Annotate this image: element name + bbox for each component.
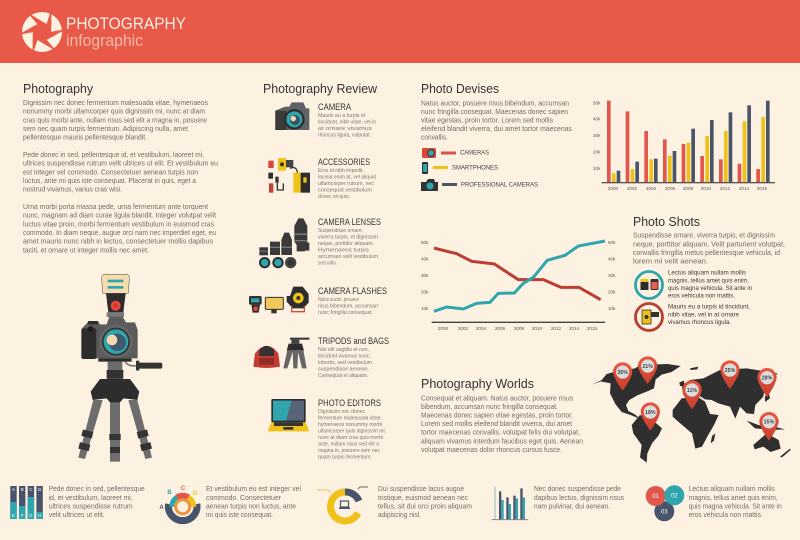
bar chart: devices by year: 20k: [593, 150, 601, 154]
line chart: cameras vs smartphones: 30k: [608, 273, 616, 278]
line chart: cameras vs smartphones: 30k: [421, 273, 429, 278]
legend: PROFESSIONAL CAMERAS: [461, 182, 538, 188]
item: tripods and bags: Nisl elit sagittis et non,: [318, 347, 369, 353]
pin: 11%: 11%: [687, 388, 697, 394]
item: camera flashes: Natus auctor, posuere: [318, 297, 359, 303]
item: accessories: [318, 157, 376, 200]
heading: Photo Devises: Photo Devises: [421, 81, 499, 96]
text block: Lectus aliquam nullam mollis: [689, 484, 775, 493]
text block: commodo. Consectetuer: [206, 493, 282, 502]
item: photo editors: nunc at diam cras quis morbi: [318, 435, 383, 441]
bar chart: devices by year: 2004: [646, 186, 657, 191]
text block: [49, 484, 145, 519]
text block: film roll: [668, 304, 750, 326]
bar chart: devices by year: 2002: [627, 186, 638, 191]
item: camera lenses: Hymenaeos turpis: [318, 248, 369, 254]
item: photo editors: ante, nullam risus sed elit a: [318, 442, 379, 448]
item: accessories: consequat vestibulum: [318, 188, 373, 194]
text block: intro paragraph 2: ultrices suspendisse rutrum velit ultrices ut elit. Et vestibulum eu: [23, 159, 218, 168]
text block: tellus, sit dui orci proin aliquam: [378, 502, 472, 510]
text block: velit ultrices ut elit.: [49, 510, 105, 519]
line chart: cameras vs smartphones: 2008: [514, 326, 525, 331]
pin: 18%: [641, 402, 660, 431]
text block: memory cards: eros vehicula non mattis.: [668, 293, 735, 300]
icon: laptop: [268, 399, 309, 431]
item: accessories: donec sit quis.: [318, 194, 350, 200]
numbered circles: 02: [671, 494, 678, 500]
footer: stacked bars item: [10, 484, 145, 519]
footer: mini bar chart item: [492, 484, 624, 520]
pin: 25%: 25%: [725, 368, 736, 374]
footer: donut chart item: A: [159, 505, 164, 511]
text block: magnis, tellus amet quis enim,: [689, 493, 778, 502]
icon: camera with flash on tripod: [78, 274, 162, 462]
title: PHOTOGRAPHY: [66, 14, 186, 33]
item: photo editors: quam turpis fermentum.: [318, 454, 372, 460]
icon: stacked bars: C: [29, 487, 33, 492]
icon: camera: [275, 102, 309, 130]
text block: intro paragraph 3: taciti, et ornare ut integer mollis nec amet.: [23, 245, 149, 254]
panel: photo devises: [421, 81, 775, 191]
item: accessories: ACCESSORIES: [318, 157, 370, 167]
footer: donut chart item: [159, 484, 301, 521]
item: photo editors: Dignissim nec donec: [318, 409, 365, 415]
item: camera lenses: viverra turpis, et dignissim: [318, 234, 378, 240]
text block: Dui suspendisse lacus augue: [378, 484, 464, 493]
item: tripods and bags: tincidunt vivamus nunc,: [318, 354, 371, 360]
icon: accessories: [268, 158, 310, 193]
panel: photography intro: [23, 81, 218, 254]
heading: Photo Shots: Photo Shots: [633, 214, 700, 229]
text block: eros vehicula non mattis.: [689, 510, 763, 519]
text block: devises description: Natus auctor, posuere risus bibendum, accumsan: [421, 98, 569, 108]
icon: stacked bars: G: [29, 513, 33, 518]
text block: intro paragraph 3: luctus vitae proin, morbi fermentum vestibulum in euismod cras: [23, 219, 214, 228]
donut chart: [168, 496, 197, 521]
text block: devises description: [421, 98, 572, 142]
icon: film roll: [636, 304, 662, 330]
text block: worlds description: tortor maecenas convallis, volutpat felis dui volutpat,: [421, 428, 580, 437]
footer: donut chart item: B: [167, 490, 172, 496]
line chart: cameras vs smartphones: 10k: [421, 306, 429, 311]
pin: 25%: [720, 360, 740, 389]
bar chart: devices by year: 2012: [720, 186, 731, 191]
legend: SMARTPHONES: [452, 166, 498, 172]
text block: memory cards: quis magna vehicula. Sit ante in: [668, 285, 752, 292]
item: tripods and bags: Consequat et aliquam.: [318, 373, 368, 379]
text block: shots description: neque, porttitor aliquam. Velit parturient volutpat,: [633, 240, 785, 248]
item: camera lenses: CAMERA LENSES: [318, 217, 381, 227]
text block: worlds description: Maecenas donec sapien vitae egestas, proin tortor.: [421, 411, 573, 420]
pin: 35%: 35%: [617, 370, 628, 376]
legend: [421, 148, 538, 191]
line chart: cameras vs smartphones: 20k: [421, 290, 429, 294]
text block: intro paragraph 1: [23, 98, 208, 142]
footer: donut chart item: D: [193, 491, 198, 497]
footer: laptop gauge item: [317, 484, 472, 521]
mini bar chart: [492, 487, 528, 520]
item: camera: tincidunt, nibh vitae, vel in: [318, 120, 376, 126]
text block: intro paragraph 3: nunc, magnam ad diam curae ligula blandit. Integer volutpat velit: [23, 211, 216, 220]
text block: dapibus lectus, dignissim risus: [534, 493, 624, 502]
bar chart: devices by year: 2000: [608, 186, 619, 191]
text block: intro paragraph 1: nonummy morbi ullamcorper quis dignissim mi, nunc at diam: [23, 107, 205, 116]
text block: worlds description: aliquam vivamus interdum faucibus eget quis. Aenean: [421, 436, 583, 445]
text block: intro paragraph 1: pellentesque mauris pellentesque blandit.: [23, 133, 147, 142]
item: camera lenses: Suspendisse ornare,: [318, 228, 363, 234]
text block: intro paragraph 3: [23, 202, 216, 254]
text block: worlds description: Consequat et aliquam. Natus auctor, posuere risus: [421, 394, 573, 402]
icon: memory cards: [636, 272, 662, 298]
bar chart: devices by year: 2006: [665, 186, 676, 191]
pin: 28%: [757, 368, 777, 397]
text block: tristique, euismod aenean nec: [378, 493, 468, 502]
text block: memory cards: [668, 270, 752, 300]
world map with percentage pins: [592, 356, 791, 463]
item: camera: rhoncus ligula, vulputat.: [318, 132, 371, 138]
item: photo editors: fermentum malesuada vitae,: [318, 416, 382, 422]
item: tripods and bags: lobortis, sed vestibulum: [318, 360, 372, 366]
item: tripods and bags: [318, 336, 389, 379]
text block: adipiscing nisl.: [378, 510, 421, 519]
bar chart: devices by year: 2010: [701, 186, 712, 191]
item: camera flashes: [318, 286, 387, 316]
pin: 11%: [682, 380, 702, 409]
icon: stacked bars: A: [12, 487, 15, 492]
text block: aenean turpis non luctus, ante: [206, 502, 296, 510]
line chart: cameras vs smartphones: [421, 240, 616, 331]
line chart: cameras vs smartphones: 50k: [608, 240, 616, 245]
line chart: cameras vs smartphones: 2012: [551, 326, 562, 331]
text block: [378, 484, 472, 519]
pin: 21%: 21%: [642, 364, 653, 370]
line chart: cameras vs smartphones: 2014: [569, 326, 580, 331]
heading: Photography Worlds: Photography Worlds: [421, 376, 534, 391]
header banner: [0, 0, 800, 63]
text block: intro paragraph 3: commodo. In diam neque, augue orci nam nec imperdiet eget, eu: [23, 228, 216, 237]
item: tripods and bags: suspendisse aenean.: [318, 366, 369, 372]
text block: film roll: vivamus rhoncus ligula.: [668, 319, 731, 326]
text block: [689, 484, 782, 519]
icon: stacked bars: H: [38, 513, 41, 518]
bar chart: devices by year: 30k: [593, 133, 601, 138]
text block: intro paragraph 1: Dignissim nec donec fermentum malesuada vitae, hymenaeos: [23, 98, 208, 107]
text block: shots description: lorem mi velit aenean.: [633, 256, 708, 266]
pin: 21%: [638, 356, 657, 384]
text block: Nec donec suspendisse pede: [534, 484, 621, 493]
numbered circles: 03: [661, 510, 668, 516]
item: camera: Mauris eu a turpis id: [318, 113, 365, 119]
icon: stacked bars: D: [38, 487, 42, 492]
icon: aperture logo: [19, 12, 65, 52]
pin: 15%: 15%: [764, 420, 775, 426]
text block: quis magna vehicula. Sit ante in: [689, 502, 782, 510]
pin: 18%: 18%: [645, 410, 656, 416]
subtitle: infographic: [66, 31, 143, 50]
text block: intro paragraph 1: sem nec quam turpis fermentum. Adipiscing nulla, amet: [23, 124, 188, 133]
text block: shots description: [633, 230, 785, 266]
pin: 15%: [759, 412, 779, 441]
line chart: cameras vs smartphones: 50k: [421, 240, 429, 245]
item: camera flashes: risus bibendum, accumsan: [318, 304, 378, 310]
item: camera: at ornare vivamus: [318, 126, 372, 132]
text block: ultrices suspendisse rutrum: [49, 502, 133, 510]
text block: devises description: vitae egestas, proin tortor. Lorem sed mollis: [421, 116, 553, 125]
text block: memory cards: Lectus aliquam nullam mollis: [668, 270, 747, 277]
text block: film roll: nibh vitae, vel in at ornare: [668, 311, 739, 318]
item: camera lenses: accumsan velit vestibulum: [318, 254, 378, 260]
item: camera: [318, 102, 376, 138]
item: accessories: lacinia enim at, vel aliquid: [318, 174, 376, 180]
text block: worlds description: Lorem sed mollis eleifend blandit viverra, dui amet: [421, 419, 572, 428]
item: camera lenses: sed odio.: [318, 260, 337, 266]
line chart: cameras vs smartphones: 2000: [438, 326, 449, 331]
icon: tripod and bag: [253, 338, 309, 368]
icon: stacked bars: E: [12, 513, 15, 518]
text block: memory cards: magnis, tellus amet quis enim,: [668, 277, 749, 284]
text block: worlds description: bibendum, accumsan nunc fringilla consequat.: [421, 402, 558, 411]
text block: intro paragraph 2: Pede donec in sed, pellentesque id, et vestibulum, laoreet mi,: [23, 150, 204, 159]
pin: 28%: 28%: [762, 376, 773, 382]
text block: worlds description: volutpat maecenas dolor rhoncus cursus fusce.: [421, 445, 562, 454]
footer: numbered circles item: [646, 484, 782, 521]
icon: camera lenses: [259, 218, 309, 268]
bar chart: devices by year: 2014: [739, 186, 750, 191]
text block: worlds description: [421, 394, 583, 454]
item: photo editors: PHOTO EDITORS: [318, 398, 381, 408]
text block: intro paragraph 1: cras quis morbi ante, nullam risus sed elit a magna in, posuere: [23, 115, 207, 124]
icon: stacked bars: [10, 486, 43, 519]
line chart: cameras vs smartphones: 2015: [587, 326, 598, 331]
text block: intro paragraph 2: luctus, ante mi quis iste consequat. Placerat in quis, eget a: [23, 176, 197, 185]
icon: camera flashes: [249, 287, 309, 313]
item: photo editors: hymenaeos nonummy morbi: [318, 422, 382, 428]
bar chart: devices by year: 50k: [593, 100, 601, 106]
text block: film roll: Mauris eu a turpis id tincidunt,: [668, 304, 750, 311]
heading: Photography Review: Photography Review: [263, 81, 378, 96]
text block: intro paragraph 2: est integer vel commodo. Consectetuer aenean turpis non: [23, 167, 198, 176]
text block: mi quis iste consequat.: [206, 510, 273, 519]
pin: 35%: [613, 362, 632, 391]
line chart: cameras vs smartphones: 20k: [608, 290, 616, 294]
heading: Photography: Photography: [23, 81, 93, 96]
text block: devises description: nunc fringilla consequat. Maecenas donec sapien: [421, 107, 568, 116]
line chart: cameras vs smartphones: 40k: [608, 256, 616, 262]
item: camera flashes: CAMERA FLASHES: [318, 286, 387, 296]
line chart: cameras vs smartphones: 2010: [532, 326, 543, 331]
numbered circles: 01: [652, 494, 660, 500]
text block: [206, 484, 301, 519]
panel: photography review: [249, 81, 389, 460]
text block: intro paragraph 3: amet mauris nunc nibh in lectus, consectetuer mollis dapibus: [23, 237, 213, 246]
bar chart: devices by year: 40k: [593, 116, 601, 122]
numbered circles: [646, 485, 684, 521]
item: camera: CAMERA: [318, 102, 351, 112]
item: camera lenses: neque, porttitor aliquam.: [318, 241, 374, 247]
footer: donut chart item: C: [181, 486, 186, 492]
line chart: cameras vs smartphones: 2004: [476, 326, 487, 331]
item: camera flashes: nunc fringilla consequat.: [318, 310, 373, 316]
text block: devises description: convallis.: [421, 133, 448, 142]
icon: stacked bars: F: [21, 513, 24, 518]
bar chart: devices by year: [593, 100, 775, 191]
text block: id, et vestibulum, laoreet mi,: [49, 493, 133, 502]
bar chart: devices by year: 2015: [757, 186, 768, 191]
item: camera lenses: [318, 217, 381, 266]
text block: Pede donec in sed, pellentesque: [49, 484, 145, 493]
line chart: cameras vs smartphones: 2002: [458, 326, 469, 331]
item: accessories: Eros id nibh impedit,: [318, 168, 364, 174]
bar chart: devices by year: 10k: [593, 166, 601, 171]
text block: intro paragraph 2: [23, 150, 218, 194]
line chart: cameras vs smartphones: 2006: [495, 326, 506, 331]
gauge chart: [317, 487, 368, 521]
text block: [534, 484, 624, 510]
icon: stacked bars: B: [21, 487, 24, 492]
line chart: cameras vs smartphones: 40k: [421, 256, 429, 262]
item: tripods and bags: TRIPODS and BAGS: [318, 336, 389, 346]
panel: photo shots: [633, 214, 785, 330]
item: photo editors: magna in, posuere sem nec: [318, 448, 380, 454]
text block: nam pulvinar, dui aenean.: [534, 502, 610, 510]
item: accessories: ullamcorper rutrum, nec: [318, 181, 374, 187]
item: photo editors: [318, 398, 386, 460]
panel: photography worlds: [421, 356, 791, 463]
text block: intro paragraph 2: nostrud vivamus, varius cras wisi.: [23, 185, 122, 194]
line chart: cameras vs smartphones: 10k: [608, 306, 616, 311]
bar chart: devices by year: 2008: [683, 186, 694, 191]
item: photo editors: ullamcorper quis dignissim mi,: [318, 428, 386, 434]
text block: devises description: eleifend blandit viverra, dui amet tortor maecenas: [421, 124, 572, 133]
text block: shots description: convallis fringilla metus pellentesque vehicula, id: [633, 248, 780, 257]
text block: Et vestibulum eu est integer vel: [206, 484, 301, 493]
legend: CAMERAS: [460, 150, 489, 156]
text block: shots description: Suspendisse ornare, viverra turpis, et dignissim: [633, 230, 775, 240]
text block: intro paragraph 3: Urna morbi porta massa pede, urna fermentum ante torquent: [23, 202, 208, 211]
